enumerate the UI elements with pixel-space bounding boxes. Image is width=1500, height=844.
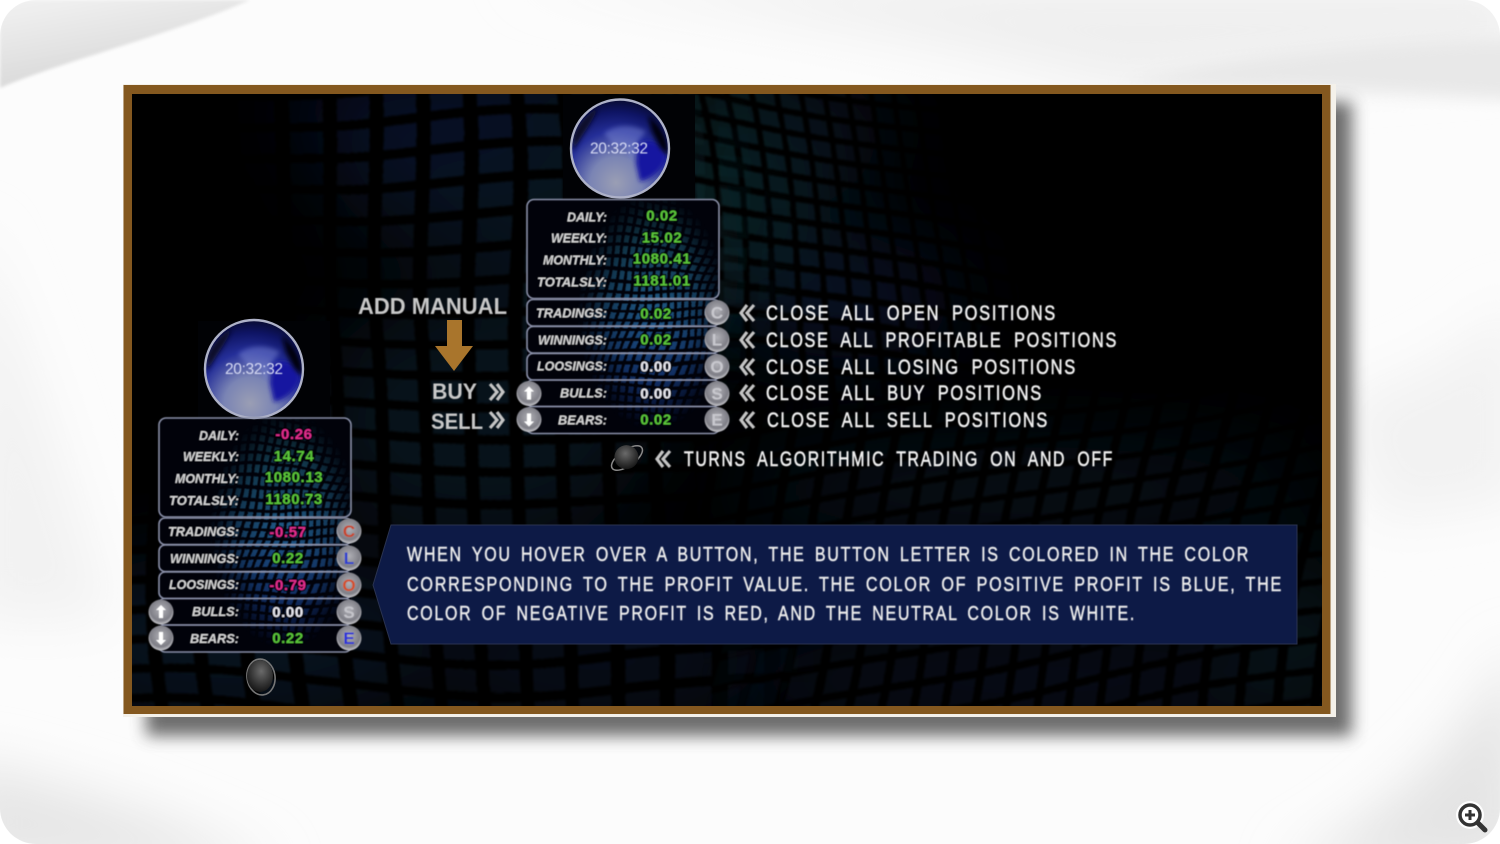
top right grid colour field <box>650 50 960 360</box>
left panel: stats box: TOTALSLY: <box>169 493 239 508</box>
right panel: black plate behind globe <box>563 94 695 200</box>
right panel: buttons: S <box>711 384 723 404</box>
left panel: rows: BULLS: <box>192 604 239 619</box>
icon: zoom magnifier <box>1456 801 1485 830</box>
left panel: grid backdrop <box>159 418 351 652</box>
right panel: stats box: 1181.01 <box>633 272 691 290</box>
right panel: stats box: 0.02 <box>646 208 678 224</box>
icon: planet toggle <box>605 437 648 477</box>
left panel: rows: -0.79 <box>269 577 307 594</box>
sell label: SELL <box>431 409 483 434</box>
left panel: rows: 0.22 <box>272 630 304 647</box>
left panel: buttons: O <box>342 576 356 595</box>
add manual label: ADD MANUAL <box>358 293 507 319</box>
right panel: rows: 0.00 <box>640 358 672 376</box>
left panel: rows: LOOSINGS: <box>169 577 239 592</box>
algorithmic trading toggle <box>605 437 1114 477</box>
right panel: stats box: TOTALSLY: <box>537 274 607 290</box>
left grid colour field <box>132 94 761 706</box>
right panel: rows: TRADINGS: <box>536 306 607 320</box>
right panel: stats box: 15.02 <box>642 230 682 246</box>
callout text: COLOR OF NEGATIVE PROFIT IS RED, AND THE NEUTRAL COLOR IS WHITE. <box>407 602 1136 625</box>
buy label <box>432 379 503 404</box>
left trading panel <box>148 318 362 696</box>
left panel: rows: 0.22 <box>272 550 304 567</box>
right panel: rows: WINNINGS: <box>538 332 607 348</box>
right panel: buttons: L <box>712 330 722 350</box>
right panel: buttons: C <box>711 304 723 322</box>
left panel: stats box: 1180.73 <box>265 491 323 508</box>
right panel: rows: 0.02 <box>640 306 672 322</box>
callout text: CORRESPONDING TO THE PROFIT VALUE. THE COLOR OF POSITIVE PROFIT IS BLUE, THE <box>407 573 1283 596</box>
right panel: buttons <box>516 300 730 432</box>
right panel: rows <box>527 300 719 434</box>
right panel: stats box: 1080.41 <box>633 250 691 268</box>
right panel: rows: BULLS: <box>560 386 607 400</box>
right panel: stats box: DAILY: <box>567 210 607 224</box>
callout text: WHEN YOU HOVER OVER A BUTTON, THE BUTTON LETTER IS COLORED IN THE COLOR <box>407 543 1250 566</box>
close actions list: CLOSE ALL SELL POSITIONS <box>767 409 1049 432</box>
callout text <box>407 543 1283 625</box>
right trading panel <box>516 94 730 435</box>
left panel: rows <box>159 518 351 652</box>
right panel: rows: 0.02 <box>640 412 672 428</box>
buy label: BUY <box>432 379 477 404</box>
left panel: buttons: E <box>343 629 355 648</box>
bottom right grid colour field <box>758 426 1322 706</box>
arrow: add manual down <box>435 320 473 371</box>
left panel: globe clock: 20:32:32 <box>225 361 283 378</box>
main panel frame <box>123 84 1336 717</box>
close actions list: CLOSE ALL OPEN POSITIONS <box>766 302 1057 325</box>
right panel: rows: BEARS: <box>558 412 607 428</box>
right panel: rows: 0.02 <box>640 332 672 348</box>
left panel: rows: TRADINGS: <box>168 524 239 539</box>
left panel: black plate behind globe <box>198 321 330 418</box>
callout: hover colour note <box>373 525 1297 644</box>
right panel: stats box: MONTHLY: <box>543 252 607 268</box>
left panel: stats box: 1080.13 <box>265 469 323 486</box>
right panel: buttons: O <box>710 358 724 376</box>
right panel: globe clock: 20:32:32 <box>590 140 648 158</box>
right panel: rows: 0.00 <box>640 386 672 402</box>
right panel: grid backdrop <box>527 200 719 432</box>
left panel: buttons <box>148 518 362 650</box>
left panel: rows: WINNINGS: <box>170 551 239 566</box>
right panel: globe clock <box>571 100 669 198</box>
left panel: buttons: C <box>343 522 355 541</box>
left panel: rows: -0.57 <box>269 524 307 541</box>
close actions list: CLOSE ALL PROFITABLE POSITIONS <box>766 329 1118 352</box>
left panel: stats box <box>159 418 351 517</box>
right panel: stats box <box>527 200 719 298</box>
left panel: stats box: 14.74 <box>274 448 314 465</box>
close actions list: CLOSE ALL BUY POSITIONS <box>766 382 1043 405</box>
left panel: buttons: L <box>344 549 354 568</box>
close actions list: CLOSE ALL LOSING POSITIONS <box>766 356 1077 379</box>
right panel: rows: LOOSINGS: <box>537 358 607 374</box>
toggle caption: TURNS ALGORITHMIC TRADING ON AND OFF <box>684 448 1114 471</box>
frame shadow <box>146 102 1352 736</box>
left panel: rows: BEARS: <box>190 631 239 646</box>
left panel: rows: 0.00 <box>272 604 304 621</box>
close actions list <box>741 302 1118 432</box>
left panel: stats box: DAILY: <box>199 428 239 443</box>
left panel: buttons: S <box>343 603 355 622</box>
background grid pattern <box>132 94 1322 706</box>
left panel: stats box: WEEKLY: <box>183 449 239 464</box>
left panel: globe clock <box>205 320 303 418</box>
left panel: toggle <box>245 657 277 697</box>
right panel: stats box: WEEKLY: <box>551 230 607 246</box>
left panel: stats box: -0.26 <box>275 426 313 443</box>
right panel: buttons: E <box>711 410 723 430</box>
left panel: stats box: MONTHLY: <box>175 471 239 486</box>
